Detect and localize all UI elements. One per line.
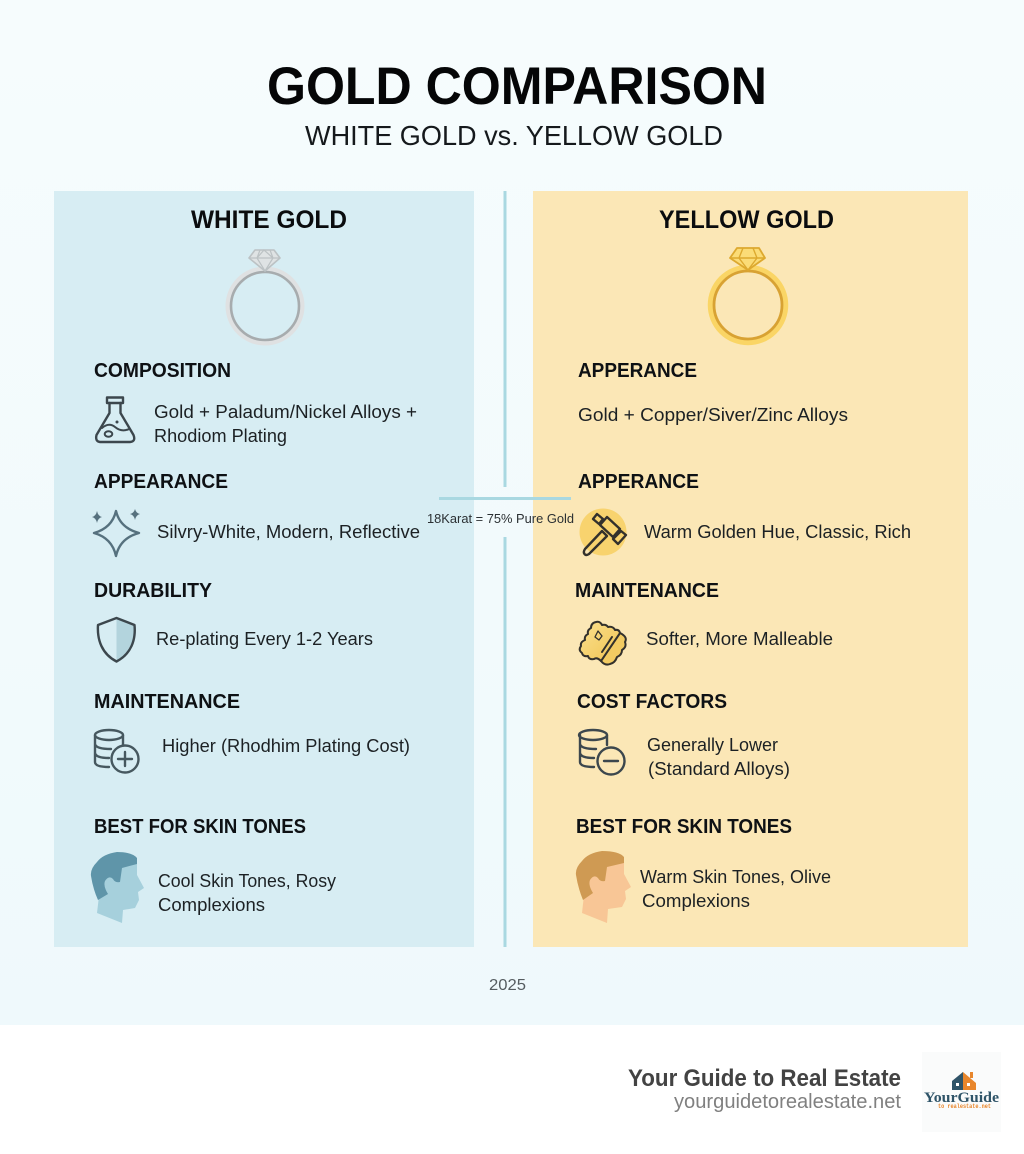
- icon: coins plus: [95, 730, 138, 772]
- composition heading (apperance): APPERANCE: [578, 360, 697, 382]
- icon: coins minus: [579, 730, 624, 774]
- durability heading: DURABILITY: [94, 580, 213, 602]
- icon: shield: [98, 618, 135, 662]
- composition heading: COMPOSITION: [94, 360, 231, 382]
- panel: white gold: Rhodiom Plating: [154, 426, 287, 446]
- panel background: [54, 191, 474, 947]
- skin tones heading: BEST FOR SKIN TONES: [94, 816, 306, 838]
- icon: cool head: [91, 852, 144, 923]
- cost factors heading: COST FACTORS: [577, 691, 727, 713]
- skin tones heading: BEST FOR SKIN TONES: [576, 816, 792, 838]
- icon: hammer: [580, 508, 626, 556]
- footer logo: [922, 1052, 1001, 1132]
- footer band: [0, 1025, 1024, 1154]
- maintenance heading: MAINTENANCE: [94, 691, 240, 713]
- appearance heading: APPEARANCE: [94, 471, 228, 493]
- footer brand name: Your Guide to Real Estate: [628, 1065, 901, 1092]
- heading: yellow gold: YELLOW GOLD: [659, 206, 834, 234]
- composition text: Gold + Copper/Siver/Zinc Alloys: [578, 405, 848, 425]
- subtitle: WHITE GOLD vs. YELLOW GOLD: [305, 120, 723, 151]
- center divider: [439, 191, 571, 947]
- footer url: yourguidetorealestate.net: [674, 1091, 901, 1113]
- icon: white gold ring: [228, 250, 302, 342]
- panel: yellow gold: (Standard Alloys): [648, 759, 790, 779]
- skin tones text: Warm Skin Tones, Olive: [640, 867, 831, 887]
- icon: flask: [96, 398, 134, 442]
- appearance text: Warm Golden Hue, Classic, Rich: [644, 522, 911, 542]
- icon: sparkle: [92, 509, 140, 556]
- composition text: Gold + Paladum/Nickel Alloys +: [154, 402, 417, 422]
- icon: warm head: [576, 851, 631, 923]
- center note: karat: 18Karat = 75% Pure Gold: [427, 511, 574, 526]
- skin tones text: Cool Skin Tones, Rosy: [158, 871, 336, 891]
- icon: yellow gold ring: [711, 248, 785, 342]
- footer logo: to realestate.net: [938, 1103, 991, 1110]
- panel: yellow gold: [533, 191, 968, 947]
- cost factors text: Generally Lower: [647, 735, 778, 755]
- panel: white gold: [54, 191, 474, 947]
- panel: yellow gold: Complexions: [642, 891, 750, 911]
- durability text: Re-plating Every 1-2 Years: [156, 629, 373, 649]
- title: GOLD COMPARISON: [267, 57, 767, 116]
- maintenance heading: MAINTENANCE: [575, 580, 719, 602]
- maintenance text: Higher (Rhodhim Plating Cost): [162, 736, 410, 756]
- appearance text: Silvry-White, Modern, Reflective: [157, 522, 420, 542]
- icon: malleable gold sheet: [580, 622, 626, 665]
- heading: white gold: WHITE GOLD: [191, 206, 347, 234]
- maintenance text: Softer, More Malleable: [646, 629, 833, 649]
- appearance heading: APPERANCE: [578, 471, 699, 493]
- footer logo: YourGuide: [924, 1090, 999, 1106]
- panel background: [533, 191, 968, 947]
- year: 2025: [489, 977, 526, 994]
- panel: white gold: Complexions: [158, 895, 265, 915]
